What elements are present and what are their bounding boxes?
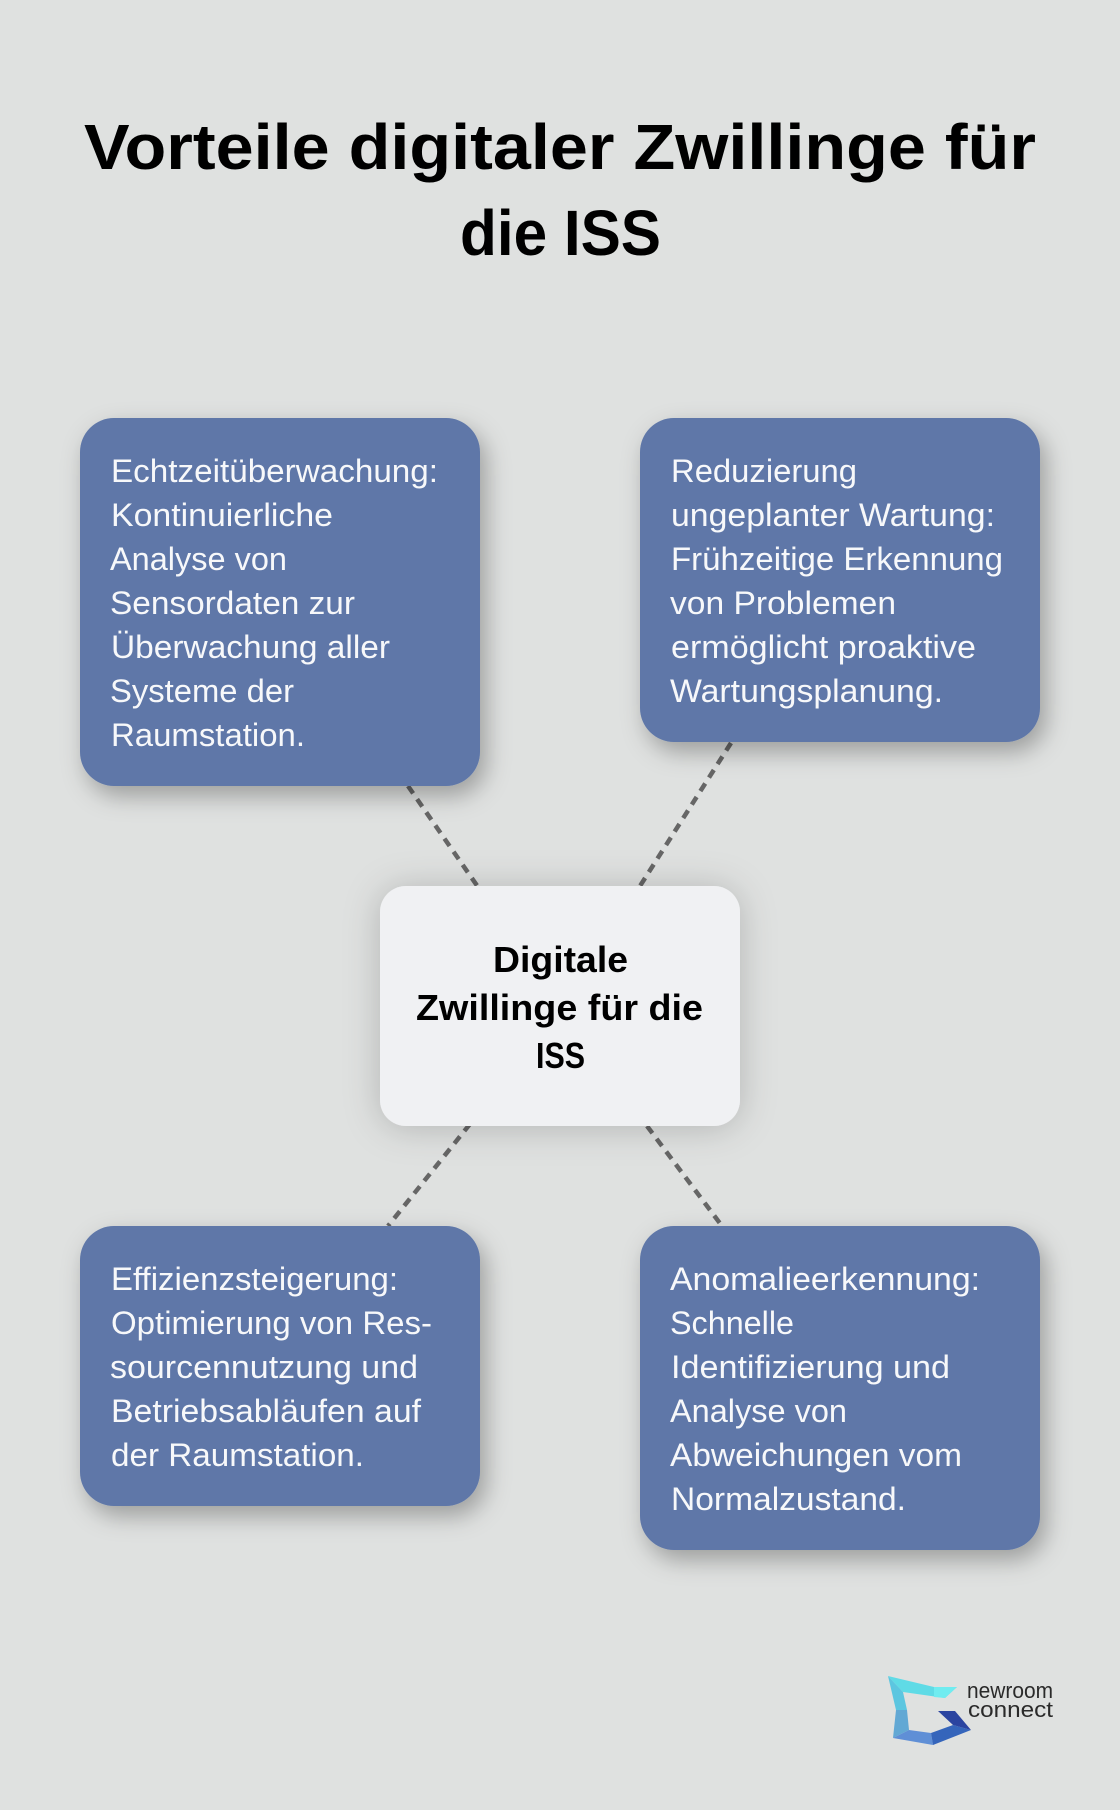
panel: Echtzeitüberwachung: Systeme der	[110, 673, 294, 709]
panel: central hub: ISS	[536, 1035, 585, 1076]
panel: central hub	[380, 886, 740, 1126]
panel: Effizienzsteigerung: der Raumstation.	[111, 1437, 364, 1473]
panel: Echtzeitüberwachung: Analyse von	[110, 541, 287, 577]
connector: top left	[408, 786, 478, 887]
connector: bottom left	[388, 1124, 470, 1226]
panel: Reduzierung ungeplanter Wartung: ermöglicht proaktive	[671, 629, 976, 665]
panel: Reduzierung ungeplanter Wartung	[640, 418, 1040, 742]
panel: Anomalieerkennung: Analyse von	[670, 1393, 847, 1429]
panel: Echtzeitüberwachung: Echtzeitüberwachung:	[111, 453, 438, 489]
panel: Anomalieerkennung: Abweichungen vom	[670, 1437, 962, 1473]
panel: Echtzeitüberwachung	[80, 418, 480, 786]
panel: central hub: Zwillinge für die	[416, 987, 703, 1028]
panel: Effizienzsteigerung: Betriebsabläufen auf	[111, 1393, 421, 1429]
title	[84, 111, 1036, 269]
panel: Effizienzsteigerung	[80, 1226, 480, 1506]
panel: Anomalieerkennung: Schnelle	[670, 1305, 794, 1341]
panel: Effizienzsteigerung: Effizienzsteigerung:	[111, 1261, 398, 1297]
panel: Echtzeitüberwachung: Sensordaten zur	[110, 585, 355, 621]
panel: Effizienzsteigerung: sourcennutzung und	[110, 1349, 418, 1385]
logo: newroom connect: newroom	[967, 1678, 1053, 1703]
panel: Anomalieerkennung: Anomalieerkennung:	[670, 1261, 980, 1297]
panel: central hub: Digitale	[493, 939, 628, 980]
panel: Echtzeitüberwachung: Überwachung aller	[111, 629, 390, 665]
panel: Reduzierung ungeplanter Wartung: Frühzeitige Erkennung	[671, 541, 1003, 577]
panel: Reduzierung ungeplanter Wartung: Reduzierung	[671, 453, 857, 489]
panel: Anomalieerkennung	[640, 1226, 1040, 1550]
panel: Reduzierung ungeplanter Wartung: Wartungsplanung.	[670, 673, 943, 709]
logo: newroom connect	[888, 1676, 1053, 1745]
panel: Echtzeitüberwachung: Raumstation.	[111, 717, 305, 753]
panel: Reduzierung ungeplanter Wartung: von Problemen	[670, 585, 896, 621]
panel: Effizienzsteigerung: Optimierung von Res-	[111, 1305, 432, 1341]
panel: Reduzierung ungeplanter Wartung: ungeplanter Wartung:	[671, 497, 995, 533]
connector: top right	[640, 743, 731, 886]
panel: Anomalieerkennung: Identifizierung und	[671, 1349, 950, 1385]
title: Vorteile digitaler Zwillinge für	[84, 111, 1036, 183]
logo: newroom connect: connect	[968, 1697, 1053, 1722]
title: die ISS	[460, 197, 661, 269]
panel: Anomalieerkennung: Normalzustand.	[671, 1481, 906, 1517]
panel: Echtzeitüberwachung: Kontinuierliche	[111, 497, 333, 533]
connector: bottom right	[647, 1126, 722, 1226]
